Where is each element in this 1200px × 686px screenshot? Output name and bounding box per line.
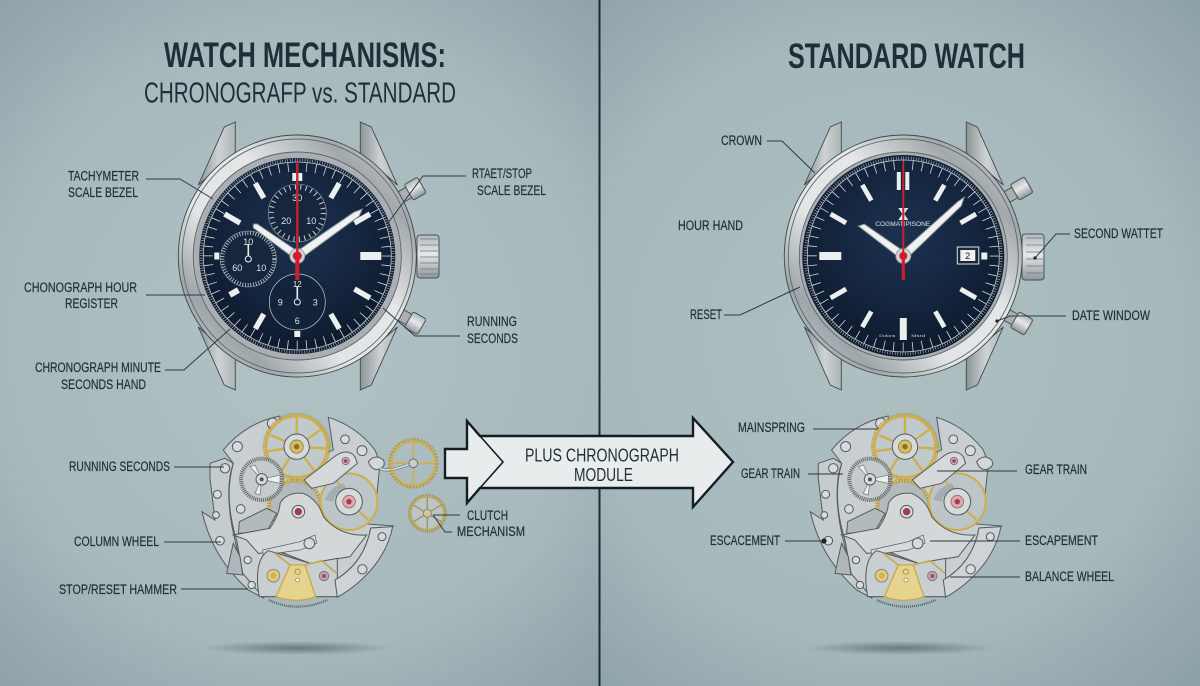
label: chronograph hour register: CHONOGRAPH HOUR bbox=[24, 280, 137, 295]
label: mainspring: MAINSPRING bbox=[738, 420, 805, 435]
label: chronograph hour register: REGISTER bbox=[65, 296, 118, 311]
label: date window: DATE WINDOW bbox=[1072, 308, 1150, 323]
pushers and crown bbox=[1002, 177, 1044, 335]
label: running seconds top bbox=[383, 308, 518, 346]
arrow: plus chronograph module bbox=[445, 418, 733, 507]
case and bezel bbox=[784, 122, 1022, 390]
label: stop/reset hammer: STOP/RESET HAMMER bbox=[59, 582, 177, 597]
label: chronograph minute seconds hand: CHRONOGRAPH MINUTE bbox=[35, 360, 161, 375]
sub-dial: top register: 20 bbox=[281, 216, 291, 226]
sub-dial: left register bbox=[220, 231, 276, 287]
label: balance wheel: BALANCE WHEEL bbox=[1025, 569, 1114, 584]
label: running seconds top: SECONDS bbox=[467, 331, 518, 346]
hands bbox=[858, 162, 964, 280]
sub-dial: top register: 10 bbox=[306, 216, 316, 226]
label: tachymeter scale bezel: SCALE BEZEL bbox=[68, 185, 138, 200]
label: column wheel: COLUMN WHEEL bbox=[74, 534, 159, 549]
detached gears bbox=[380, 439, 446, 532]
sub-dial: bottom register: 3 bbox=[313, 298, 318, 308]
label: second wattet bbox=[1033, 226, 1163, 260]
label: chronograph minute seconds hand: SECONDS HAND bbox=[61, 377, 146, 392]
pushers and crown bbox=[396, 177, 439, 335]
dial logo: Msrd bbox=[911, 333, 925, 338]
label: tachymeter scale bezel bbox=[68, 168, 213, 200]
label: date window bbox=[995, 308, 1150, 323]
sub-dial: top register: 30 bbox=[292, 193, 302, 203]
sub-dial: bottom register bbox=[269, 274, 325, 330]
title: left bbox=[144, 36, 456, 110]
sub-dial: top register bbox=[268, 184, 326, 242]
label: crown bbox=[721, 133, 815, 173]
sub-dial: bottom register: 6 bbox=[295, 316, 300, 326]
dial logo bbox=[875, 208, 931, 338]
label: reset: RESET bbox=[690, 307, 722, 322]
sub-dial: left register: 10 bbox=[256, 263, 266, 273]
label: chronograph hour register bbox=[24, 280, 205, 311]
dial logo: COGMATIPISONE bbox=[875, 221, 931, 228]
title: left: CHRONOGRAFP vs. STANDARD bbox=[144, 78, 456, 110]
chronograph watch bbox=[178, 122, 439, 390]
label: start/stop scale bezel: RTAET/STOP bbox=[472, 166, 532, 181]
label: hour hand: HOUR HAND bbox=[678, 218, 743, 233]
background right panel bbox=[600, 0, 1200, 686]
standard movement bbox=[810, 414, 1002, 607]
hour markers bbox=[214, 173, 381, 337]
chronograph movement bbox=[202, 414, 446, 607]
date window: 2 bbox=[965, 251, 970, 261]
label: running seconds movement: RUNNING SECONDS bbox=[69, 459, 170, 474]
dial logo: Dutons bbox=[879, 333, 895, 338]
label: start/stop scale bezel: SCALE BEZEL bbox=[477, 183, 546, 198]
sub-dial: bottom register: 9 bbox=[278, 298, 283, 308]
label: chronograph minute seconds hand bbox=[35, 329, 230, 392]
shadow under right movement bbox=[805, 641, 995, 655]
hour markers bbox=[819, 172, 987, 340]
label: gear train right: GEAR TRAIN bbox=[1025, 462, 1087, 477]
label: escapement: ESCAPEMENT bbox=[1025, 533, 1098, 548]
hands bbox=[253, 162, 362, 280]
shadow under left movement bbox=[202, 641, 392, 655]
label: running seconds top: RUNNING bbox=[467, 314, 517, 329]
label: reset bbox=[690, 287, 800, 322]
background left panel bbox=[0, 0, 600, 686]
label: start/stop scale bezel bbox=[388, 166, 546, 223]
label: mainspring bbox=[738, 420, 878, 435]
arrow: plus chronograph module: PLUS CHRONOGRAPH bbox=[525, 446, 679, 466]
label: escacement: ESCACEMENT bbox=[710, 533, 780, 548]
title: right: STANDARD WATCH bbox=[788, 37, 1025, 76]
sub-dial: left register: 10 bbox=[243, 237, 253, 247]
arrow: plus chronograph module: MODULE bbox=[574, 465, 633, 485]
label: gear train left: GEAR TRAIN bbox=[741, 466, 800, 481]
title: left: WATCH MECHANISMS: bbox=[164, 36, 446, 75]
date window bbox=[957, 247, 979, 264]
standard watch bbox=[784, 122, 1044, 390]
label: clutch mechanism bbox=[433, 508, 525, 539]
label: clutch mechanism: CLUTCH bbox=[467, 508, 508, 523]
sub-dial: bottom register: 12 bbox=[293, 280, 302, 289]
sub-dial: left register: 60 bbox=[232, 263, 242, 273]
label: tachymeter scale bezel: TACHYMETER bbox=[68, 168, 139, 184]
dial bbox=[199, 158, 395, 354]
dial bbox=[802, 155, 1004, 357]
case and bezel bbox=[178, 122, 416, 390]
label: second wattet: SECOND WATTET bbox=[1074, 226, 1163, 241]
centre divider bbox=[598, 0, 600, 686]
label: crown: CROWN bbox=[721, 133, 762, 148]
label: clutch mechanism: MECHANISM bbox=[457, 524, 525, 539]
